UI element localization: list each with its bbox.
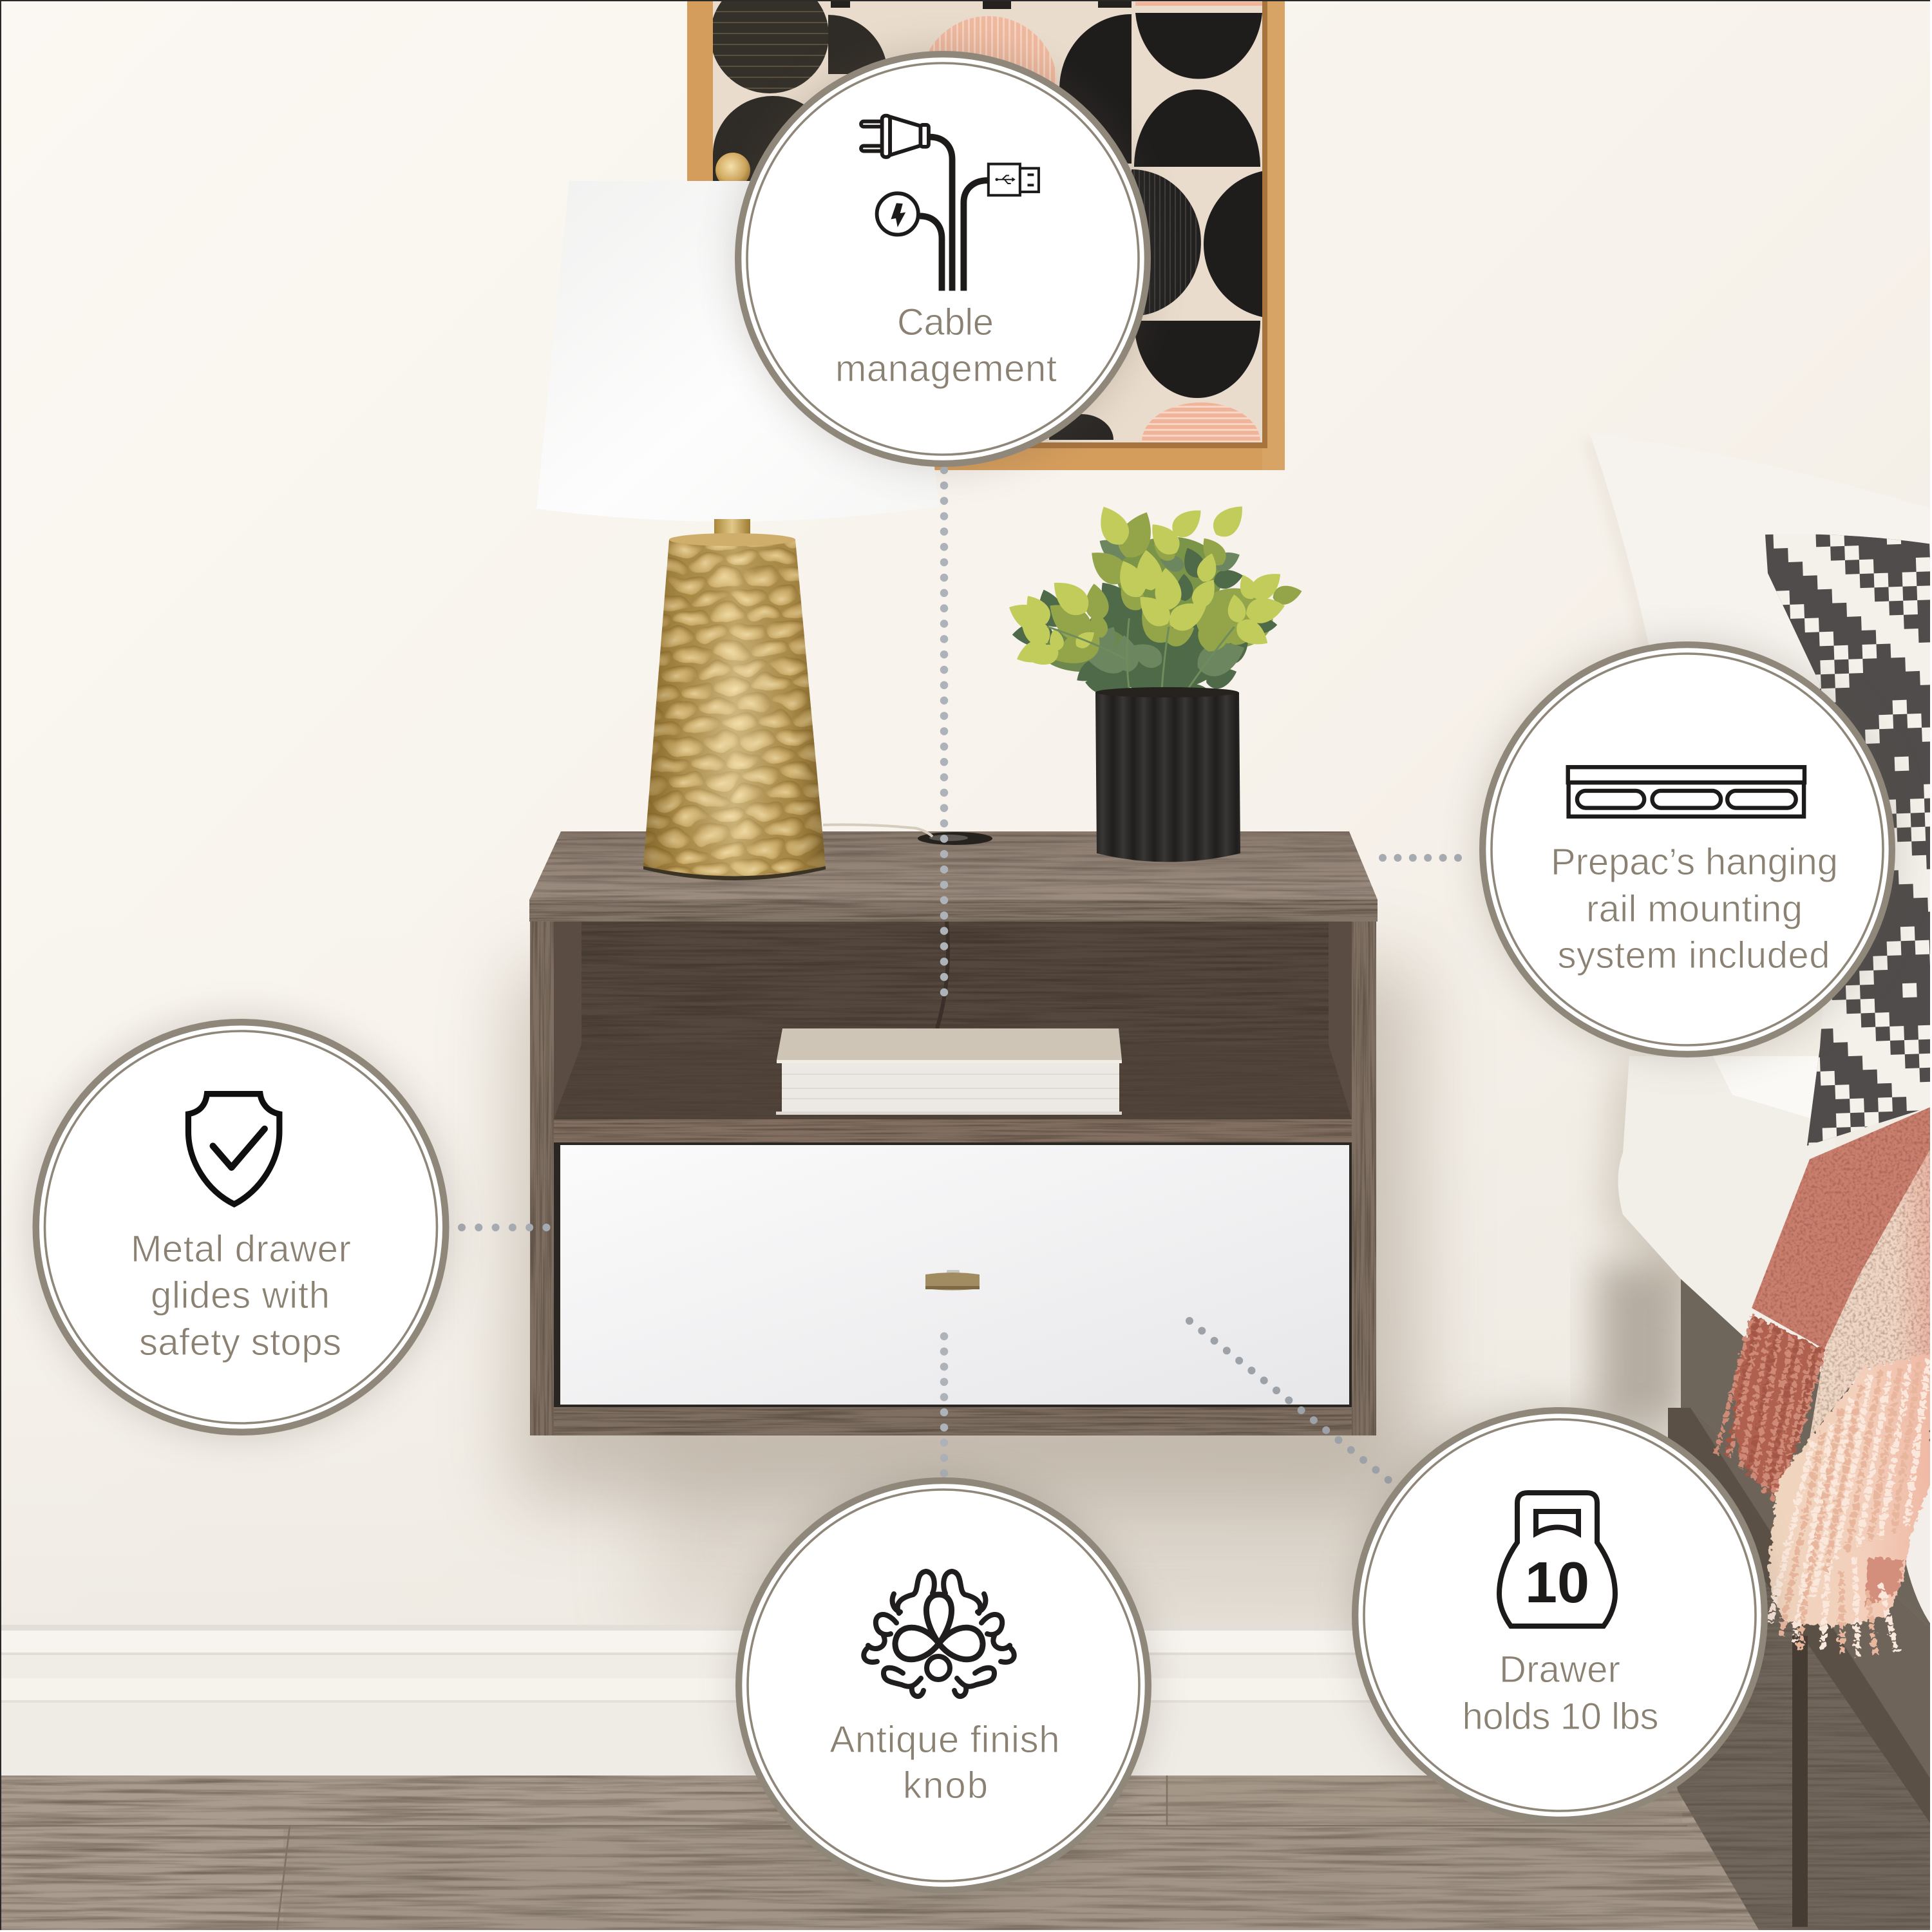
antique knob xyxy=(925,1270,980,1291)
label: hanging rail: rail mounting xyxy=(1586,888,1803,930)
coral fringe xyxy=(1716,1314,1824,1501)
white drawer front xyxy=(560,1145,1349,1405)
bottom rail xyxy=(554,1407,1352,1435)
floor planks xyxy=(0,1776,1932,1932)
pillow: white back pillows xyxy=(1580,433,1932,842)
finial xyxy=(715,153,750,187)
coral band xyxy=(1752,1106,1932,1349)
dotted leader: drawer capacity xyxy=(1189,1321,1388,1480)
bed backing xyxy=(1668,1408,1932,1932)
icon: 10 lb kettlebell weight xyxy=(1499,1493,1615,1626)
hammered gold base xyxy=(643,533,826,880)
label: cable management: management xyxy=(835,348,1057,390)
book xyxy=(776,1028,1122,1115)
lamp cord xyxy=(823,825,933,837)
cream band xyxy=(1810,1146,1932,1438)
callout: drawer capacity xyxy=(1350,1406,1769,1824)
label: drawer capacity: holds 10 lbs xyxy=(1462,1696,1659,1738)
label: cable management: Cable xyxy=(897,301,994,343)
middle divider xyxy=(554,1119,1352,1142)
baseboard xyxy=(0,1625,1932,1776)
bed rail xyxy=(1668,1408,1932,1826)
grommet xyxy=(918,832,992,845)
left side panel xyxy=(530,922,554,1435)
bed frame xyxy=(1668,1279,1932,1932)
icon: 10 lb kettlebell weight: 10 xyxy=(1525,1551,1589,1615)
bed leg post xyxy=(1792,1636,1808,1927)
foliage xyxy=(1004,498,1304,705)
dotted leader: knob xyxy=(940,1336,948,1476)
label: metal drawer glides: safety stops xyxy=(139,1321,341,1363)
dotted leader: cable xyxy=(940,470,948,993)
headboard side panel xyxy=(1681,1279,1932,1629)
label: metal drawer glides: Metal drawer xyxy=(131,1228,351,1270)
label: cable management xyxy=(835,301,1057,390)
icon: hanging rail xyxy=(1568,767,1804,817)
label: antique finish knob: Antique finish xyxy=(829,1719,1060,1761)
callout: cable management xyxy=(734,50,1152,468)
label: antique finish knob: knob xyxy=(903,1765,988,1806)
pink fringe xyxy=(1768,1352,1932,1658)
top surface xyxy=(529,831,1378,900)
throw blanket xyxy=(1716,1106,1932,1658)
table lamp xyxy=(536,153,939,902)
label: drawer capacity: Drawer xyxy=(1499,1649,1620,1690)
icon: shield with check xyxy=(188,1094,279,1204)
label: hanging rail: Prepac’s hanging xyxy=(1551,841,1838,883)
label: antique finish knob xyxy=(829,1719,1060,1806)
dotted leader: rail xyxy=(1383,854,1459,862)
open compartment xyxy=(554,922,1352,1121)
callout: hanging rail xyxy=(1478,640,1897,1059)
label: hanging rail xyxy=(1551,841,1838,976)
nightstand xyxy=(529,831,1378,1435)
icon: ornamental knot xyxy=(864,1571,1014,1696)
right side panel xyxy=(1352,922,1376,1435)
lower bed face xyxy=(1668,1439,1932,1932)
framed art xyxy=(687,1,1285,470)
dotted leader: glides xyxy=(462,1224,547,1231)
top surface below throw xyxy=(1690,1408,1932,1781)
label: hanging rail: system included xyxy=(1557,934,1830,976)
drawer cavity xyxy=(554,1142,1352,1408)
potted plant xyxy=(1004,498,1304,873)
label: metal drawer glides: glides with xyxy=(151,1274,330,1316)
duvet shadow on wall xyxy=(1604,1068,1725,1300)
lamp neck xyxy=(714,519,750,538)
black ribbed pot xyxy=(1095,687,1240,862)
patterned pillow xyxy=(1765,535,1930,1146)
icon: cables with plug, USB and charger xyxy=(861,116,1039,290)
callout: antique finish knob xyxy=(734,1476,1153,1895)
duvet xyxy=(1618,1056,1835,1378)
shelf shadow on wall xyxy=(515,966,1417,1501)
front edge xyxy=(529,900,1378,922)
label: metal drawer glides xyxy=(131,1228,351,1363)
white pillow edge xyxy=(1906,1452,1932,1626)
lamp shade xyxy=(536,181,939,522)
label: drawer capacity xyxy=(1462,1649,1659,1738)
callout: metal drawer glides xyxy=(32,1018,450,1436)
